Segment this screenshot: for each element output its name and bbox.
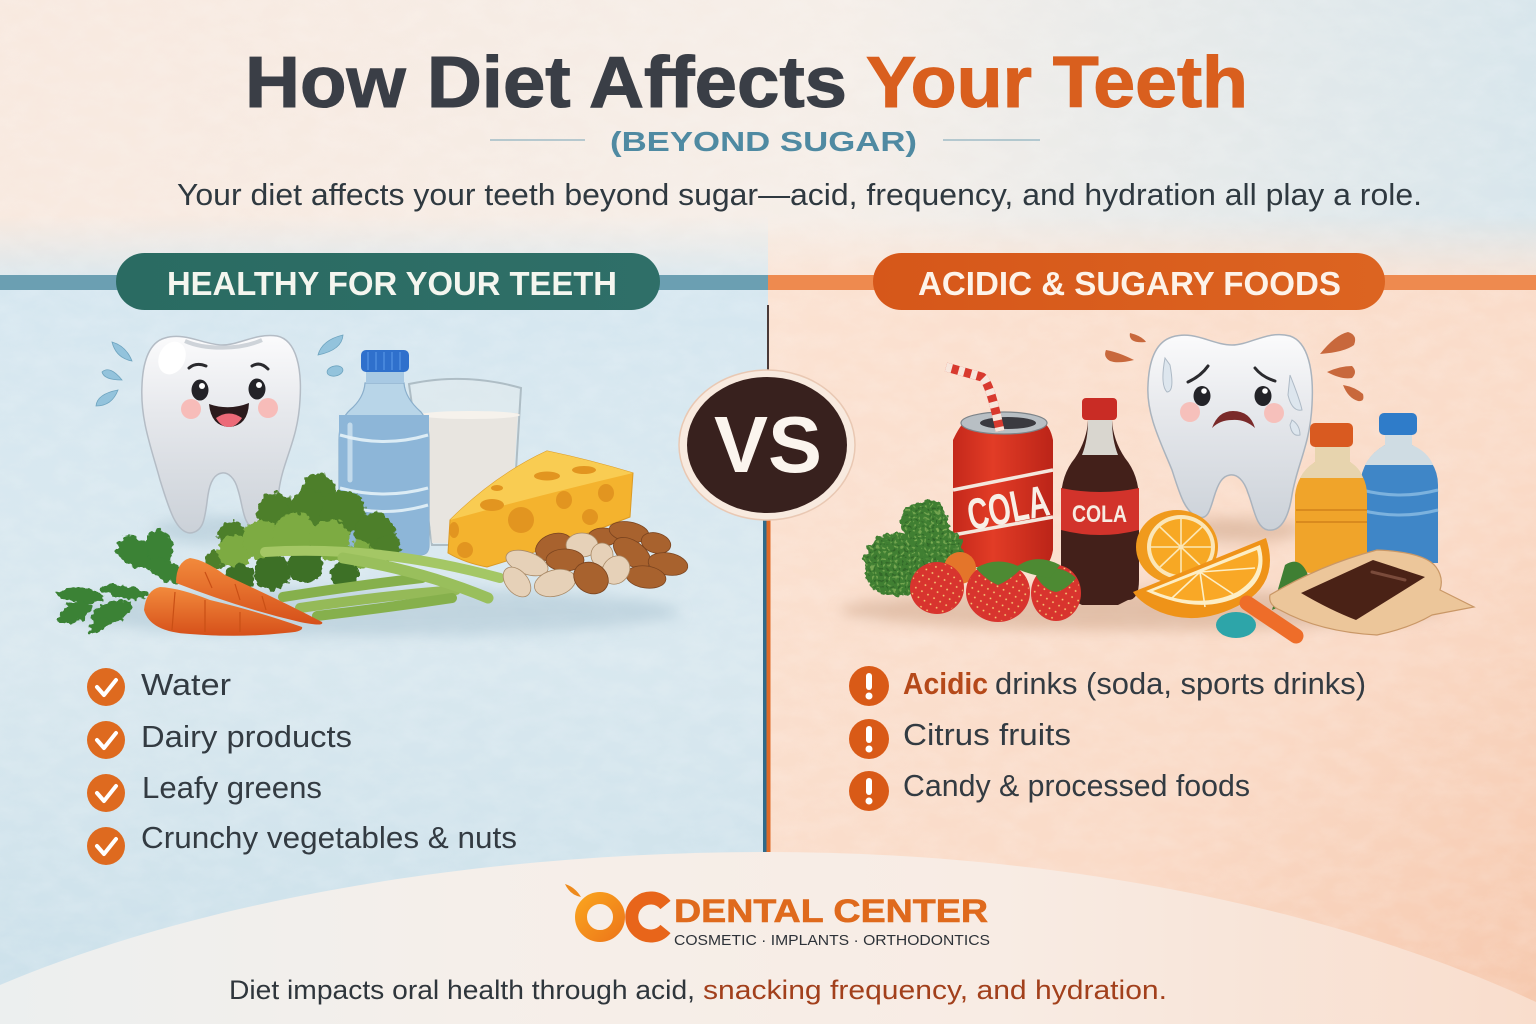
icon: stress drops	[1105, 332, 1363, 401]
list item: water: Water	[141, 667, 231, 702]
panel: healthy foods	[55, 253, 690, 865]
icon: worried tooth	[1148, 335, 1312, 530]
icon: leafy greens and celery	[205, 473, 500, 616]
VS badge: VS	[714, 400, 822, 489]
list item: crunchy vegetables and nuts	[87, 820, 517, 865]
header bands	[0, 275, 1536, 290]
list item: water	[87, 667, 231, 706]
icon: happy tooth	[142, 336, 300, 533]
footer takeaway: snacking frequency, and hydration.	[703, 975, 1167, 1005]
icon: water droplets	[96, 335, 344, 406]
icon: blue sports bottle	[1360, 413, 1438, 563]
logo: OC Dental Center	[565, 884, 990, 949]
icon: cola can	[953, 412, 1053, 567]
icon: water bottle	[339, 350, 429, 555]
heading: healthy for your teeth	[116, 253, 660, 310]
icon: orange drink bottle	[1295, 423, 1367, 573]
list item: citrus fruits	[849, 717, 1071, 759]
heading: healthy for your teeth: HEALTHY FOR YOUR TEETH	[167, 265, 617, 302]
icon: cola can: COLA	[963, 476, 1053, 540]
heading: acidic and sugary foods	[873, 253, 1385, 310]
icon: striped straw	[946, 367, 1000, 431]
icon: cola bottle	[1061, 398, 1139, 605]
healthy foods list	[87, 667, 517, 865]
list item: acidic drinks: drinks (soda, sports drinks)	[995, 666, 1366, 701]
icon: cola bottle: COLA	[1072, 501, 1127, 528]
bottom hill panel	[0, 852, 1536, 1024]
title: How Diet Affects	[245, 43, 847, 123]
icon: carrots	[55, 527, 322, 636]
list item: leafy greens: Leafy greens	[142, 770, 322, 805]
logo: OC Dental Center: COSMETIC · IMPLANTS · ORTHODONTICS	[674, 932, 990, 949]
subtitle: (BEYOND SUGAR)	[610, 126, 917, 157]
heading: acidic and sugary foods: ACIDIC & SUGARY FOODS	[918, 265, 1341, 302]
list item: crunchy vegetables and nuts: Crunchy vegetables & nuts	[141, 820, 517, 855]
icon: cheese wedge	[448, 451, 633, 567]
list item: candy and processed foods	[849, 768, 1250, 811]
intro sentence: Your diet affects your teeth beyond sugar—acid, frequency, and hydration all play a role.	[177, 177, 1422, 212]
food shadow	[60, 516, 680, 636]
VS badge	[679, 370, 855, 520]
icon: nuts	[498, 519, 690, 602]
list item: acidic drinks	[849, 666, 1366, 706]
list item: citrus fruits: Citrus fruits	[903, 717, 1071, 752]
icon: orange wedge	[1133, 538, 1270, 618]
footer takeaway	[229, 975, 1167, 1005]
title	[245, 43, 1248, 123]
icon: orange half	[1136, 510, 1218, 584]
panel: acidic and sugary foods	[840, 253, 1474, 811]
footer takeaway: Diet impacts oral health through acid,	[229, 975, 695, 1005]
icon: chocolate toast and candy	[1216, 550, 1474, 638]
food shadow	[840, 518, 1440, 630]
icon: glass of milk	[409, 379, 521, 545]
icon: broccoli	[863, 500, 963, 597]
title: Your Teeth	[866, 43, 1248, 123]
centre divider	[763, 305, 770, 853]
icon: strawberries	[910, 552, 1081, 622]
list item: dairy products: Dairy products	[141, 719, 352, 754]
list item: acidic drinks: Acidic	[903, 666, 988, 701]
list item: candy and processed foods: Candy & processed foods	[903, 768, 1250, 803]
list item: dairy products	[87, 719, 352, 759]
acidic foods list	[849, 666, 1366, 811]
logo: OC Dental Center: DENTAL CENTER	[674, 893, 988, 929]
list item: leafy greens	[87, 770, 322, 812]
